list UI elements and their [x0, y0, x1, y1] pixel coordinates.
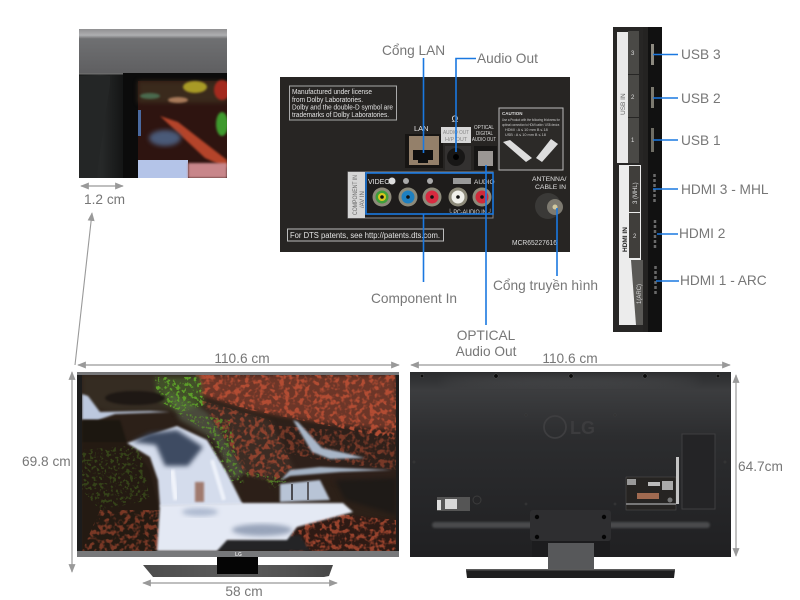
- Caution label: HDMI : A ≤ 10 mm B ≤ 18: [505, 128, 548, 132]
- right mid stream: [293, 420, 365, 459]
- LAN port: LAN: [414, 124, 429, 133]
- dark rocks, left: [82, 420, 127, 443]
- Caution label: CAUTION: [502, 111, 522, 116]
- Component and AV inputs: AUDIO: [474, 179, 495, 186]
- callout: Cổng LAN: Cổng LAN: [382, 43, 445, 58]
- Audio out port: [441, 114, 471, 170]
- USB label strip: USB IN: [620, 93, 627, 115]
- rocks, upper left: [82, 375, 200, 412]
- shell sheen: [440, 376, 700, 386]
- screws: [413, 374, 726, 505]
- Dolby license label: Dolby and the double-D symbol are: [292, 104, 393, 112]
- Optical port: DIGITAL: [476, 131, 493, 137]
- top left stream: [82, 394, 170, 420]
- HDMI label strip: 3 (MHL): [633, 182, 639, 204]
- callout: Audio Out: [456, 51, 538, 152]
- rating label: [437, 496, 481, 511]
- Dolby license label: Manufactured under license: [292, 89, 372, 96]
- Caution label: optimal connection to HDMI cable / USB device.: [502, 123, 560, 127]
- stand mount: [530, 510, 611, 557]
- measure: stand width: 58 cm: [225, 584, 263, 599]
- Audio out port: Ω: [452, 114, 458, 124]
- callout: HDMI 2: [657, 226, 725, 241]
- Antenna port: CABLE IN: [535, 184, 566, 191]
- Dolby license label: from Dolby Laboratories.: [292, 97, 363, 104]
- dark rock mid right: [242, 474, 270, 490]
- callout: OPTICAL Audio Out: OPTICAL: [457, 328, 516, 343]
- side port strip miniature: [676, 457, 679, 504]
- lower right rocks: [287, 512, 396, 551]
- LG embossed logo: LG: [570, 418, 595, 438]
- Antenna port: ANTENNA/: [532, 176, 566, 183]
- panel: rear connector plate: [280, 77, 570, 252]
- LG embossed logo: [544, 416, 595, 438]
- TV frame: [77, 372, 399, 557]
- callout: HDMI 3 - MHL: HDMI 3 - MHL: [681, 182, 769, 197]
- measure: back height: 64.7cm: [738, 459, 783, 474]
- Optical port: OPTICAL: [474, 125, 494, 131]
- LAN port: [405, 124, 443, 168]
- stand neck: [548, 543, 594, 570]
- HDMI label strip: 2: [633, 234, 637, 240]
- screen: waterfall photo: [82, 375, 396, 551]
- callout: USB 2: [653, 91, 721, 106]
- USB label strip: [617, 31, 639, 163]
- callout: HDMI 1 - ARC: HDMI 1 - ARC: [680, 273, 767, 288]
- green foliage: [155, 377, 205, 412]
- DTS patents label: For DTS patents, see http://patents.dts.com.: [290, 231, 440, 240]
- callout: Component In: [366, 173, 493, 306]
- Component and AV inputs: /AV IN: [360, 191, 366, 208]
- Component and AV inputs: └ PC-AUDIO IN ┘: [448, 208, 492, 216]
- callout: HDMI 2: HDMI 2: [679, 226, 725, 241]
- Audio out port: AUDIO OUT: [443, 130, 470, 136]
- front TV: [77, 372, 399, 577]
- Caution label: USB : A ≤ 10 mm B ≤ 18: [505, 133, 546, 137]
- back TV: [410, 372, 731, 578]
- LG logo on bar: LG: [235, 552, 242, 558]
- stand base: [143, 565, 333, 577]
- HDMI label strip: [619, 165, 643, 325]
- central waterfall: [127, 426, 243, 507]
- Component and AV inputs: VIDEO/: [368, 179, 392, 186]
- measure: front width: 110.6 cm: [214, 351, 270, 366]
- measure: bezel width 1.2 cm: 1.2 cm: [84, 192, 125, 207]
- Dolby license label: [290, 86, 396, 120]
- horizontal ridge: [432, 522, 710, 528]
- callout: USB 1: [653, 133, 721, 148]
- stand neck: [217, 557, 258, 574]
- callout: OPTICAL Audio Out: [456, 165, 517, 359]
- Caution label: [499, 108, 563, 170]
- Component and AV inputs: [348, 172, 495, 218]
- measure: back width: 110.6 cm: [542, 351, 598, 366]
- USB label strip: 3: [631, 51, 635, 57]
- HDMI label strip: HDMI IN: [622, 227, 629, 252]
- panel: side ports: [613, 27, 662, 332]
- callout: Cổng truyền hình: Cổng truyền hình: [493, 278, 598, 293]
- callout: Audio Out: Audio Out: [477, 51, 538, 66]
- panel: corner close-up of TV bezel: [79, 28, 230, 178]
- Component and AV inputs: COMPONENT IN: [353, 175, 359, 215]
- callout: Cổng truyền hình: [493, 208, 598, 293]
- USB label strip: 2: [631, 95, 635, 101]
- Caution label: Use a Product with the following thickness for: [502, 118, 561, 122]
- Dolby license label: trademarks of Dolby Laboratories.: [292, 112, 389, 119]
- callout: USB 2: USB 2: [681, 91, 721, 106]
- back shell: [410, 372, 731, 557]
- USB and HDMI ports: [651, 44, 656, 294]
- Optical port: AUDIO OUT: [472, 137, 496, 143]
- Audio out port: H/P OUT: [445, 137, 468, 143]
- connector plate miniature: [626, 477, 676, 510]
- HDMI label strip: 1(ARC): [637, 284, 643, 304]
- arrow: from front TV corner to close-up: [75, 213, 92, 365]
- stand base: [466, 570, 675, 578]
- callout: OPTICAL Audio Out: Audio Out: [456, 344, 517, 359]
- callout: USB 3: USB 3: [681, 47, 721, 62]
- pool: [157, 503, 353, 551]
- callout: Component In: Component In: [371, 291, 457, 306]
- measure: front height: 69.8 cm: [22, 454, 71, 469]
- callout: USB 3: [653, 47, 721, 62]
- callout: Cổng LAN: [382, 43, 445, 153]
- Optical port: [472, 125, 497, 170]
- callout: USB 1: USB 1: [681, 133, 721, 148]
- access cover: [682, 434, 715, 509]
- model number: MCR65227616: [512, 240, 557, 247]
- Antenna port: [532, 176, 566, 219]
- measure: bezel width 1.2 cm: [81, 186, 125, 207]
- screen pixels: [138, 80, 230, 178]
- USB label strip: 1: [631, 138, 635, 144]
- forest floor, upper right: [195, 375, 396, 440]
